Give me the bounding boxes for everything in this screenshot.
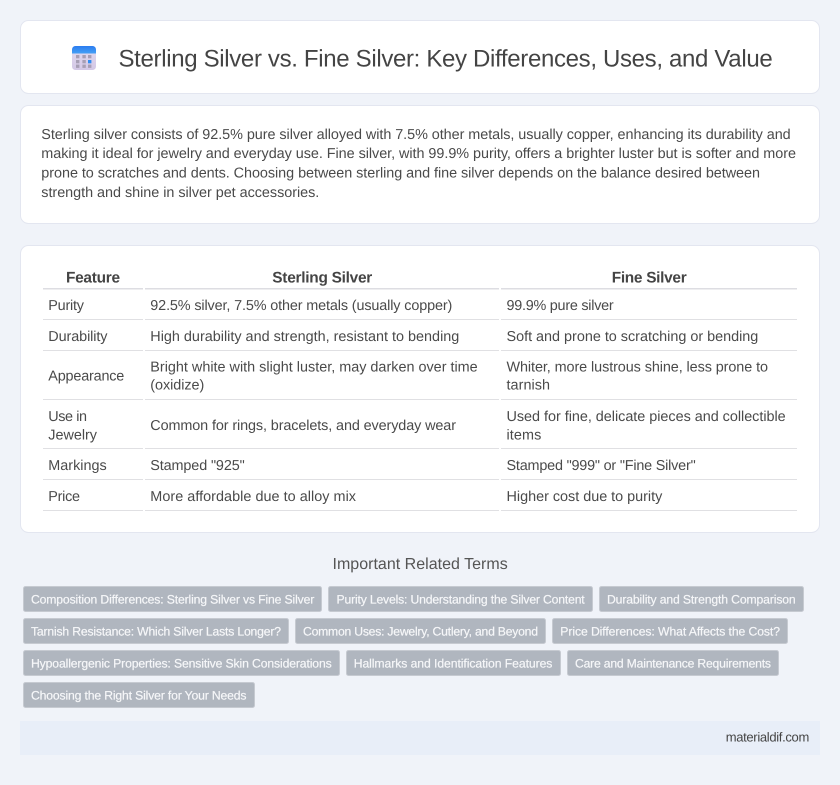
table row: appearance (43, 360, 797, 400)
tag: tarnish resistance: Tarnish Resistance: Which Silver Lasts Longer? (31, 624, 281, 638)
tag: composition differences (24, 586, 322, 612)
table row: purity: Purity (48, 298, 85, 314)
table row: durability: Durability (48, 329, 108, 345)
table row: purity: 92.5% silver, 7.5% other metals (usually copper) (150, 298, 452, 314)
table row: durability (43, 329, 797, 350)
panel: introduction (20, 106, 820, 224)
heading: important related terms: Important Related Terms (332, 556, 508, 573)
tag: composition differences: Composition Differences: Sterling Silver vs Fine Silver (31, 592, 314, 606)
table row: use in jewelry: Common for rings, bracelets, and everyday wear (150, 418, 456, 434)
table row: use in jewelry: Use in (48, 409, 87, 425)
tag: price differences: Price Differences: What Affects the Cost? (560, 624, 780, 638)
footer (20, 721, 820, 755)
title: Sterling Silver vs. Fine Silver: Key Differences, Uses, and Value (118, 46, 773, 72)
tag: hypoallergenic properties (24, 650, 340, 676)
text block: introduction paragraph: making it ideal for jewelry and everyday use. Fine silver, with 99.9% purity, offers a brighter luster but is softer and more (41, 146, 796, 162)
tag: common uses (296, 618, 546, 644)
table row: price: Price (48, 489, 80, 505)
tag: choosing the right silver (24, 682, 254, 708)
tag: price differences (552, 618, 788, 644)
related terms tags (24, 586, 804, 708)
table row: purity: 99.9% pure silver (506, 298, 614, 314)
table row: appearance: tarnish (506, 378, 550, 394)
tag: care and maintenance (568, 650, 778, 676)
table row: markings (43, 458, 797, 480)
table row: use in jewelry: Jewelry (48, 428, 98, 444)
text block: introduction paragraph: Sterling silver consists of 92.5% pure silver alloyed with 7.5% other metals, usually copper, enhancing its durability and (41, 127, 791, 143)
table row: appearance: Bright white with slight luster, may darken over time (150, 360, 478, 376)
tag: purity levels (328, 586, 592, 612)
table row: markings: Markings (48, 458, 107, 474)
tag: tarnish resistance (24, 618, 288, 644)
table row: price: More affordable due to alloy mix (150, 489, 357, 505)
table row: price (43, 489, 797, 510)
table header row: Fine Silver (612, 270, 687, 287)
tag: purity levels: Purity Levels: Understanding the Silver Content (336, 592, 585, 606)
tag: hallmarks (346, 650, 560, 676)
table row: markings: Stamped "999" or "Fine Silver" (506, 458, 696, 474)
table row: markings: Stamped "925" (150, 458, 245, 474)
tag: hallmarks: Hallmarks and Identification Features (354, 656, 552, 670)
table row: use in jewelry (43, 409, 797, 448)
tag: durability and strength (600, 586, 804, 612)
table row: use in jewelry: Used for fine, delicate pieces and collectible (506, 409, 786, 425)
tag: common uses: Common Uses: Jewelry, Cutlery, and Beyond (303, 624, 538, 638)
table row: price: Higher cost due to purity (506, 489, 663, 505)
icon: calendar (72, 46, 96, 70)
tag: choosing the right silver: Choosing the Right Silver for Your Needs (31, 688, 246, 702)
text block: introduction paragraph: strength and shine in silver pet accessories. (41, 185, 319, 201)
table row: appearance: Appearance (48, 369, 124, 385)
table header row: Feature (66, 270, 120, 287)
footer: materialdif.com (726, 730, 809, 745)
panel: comparison table (20, 246, 820, 532)
table row: durability: Soft and prone to scratching or bending (506, 329, 758, 345)
table header row: Sterling Silver (272, 270, 372, 287)
table header row (43, 270, 797, 289)
table row: use in jewelry: items (506, 428, 541, 444)
tag: care and maintenance: Care and Maintenance Requirements (575, 656, 771, 670)
tag: hypoallergenic properties: Hypoallergenic Properties: Sensitive Skin Considerations (31, 656, 332, 670)
text block: introduction paragraph (41, 127, 796, 201)
tag: durability and strength: Durability and Strength Comparison (607, 592, 796, 606)
panel: header (20, 20, 820, 94)
table row: appearance: Whiter, more lustrous shine, less prone to (506, 360, 768, 376)
text block: introduction paragraph: prone to scratches and dents. Choosing between sterling and fine silver depends on the balance desired between (41, 166, 760, 182)
table row: durability: High durability and strength, resistant to bending (150, 329, 459, 345)
table row: purity (43, 298, 797, 320)
table row: appearance: (oxidize) (150, 378, 204, 394)
